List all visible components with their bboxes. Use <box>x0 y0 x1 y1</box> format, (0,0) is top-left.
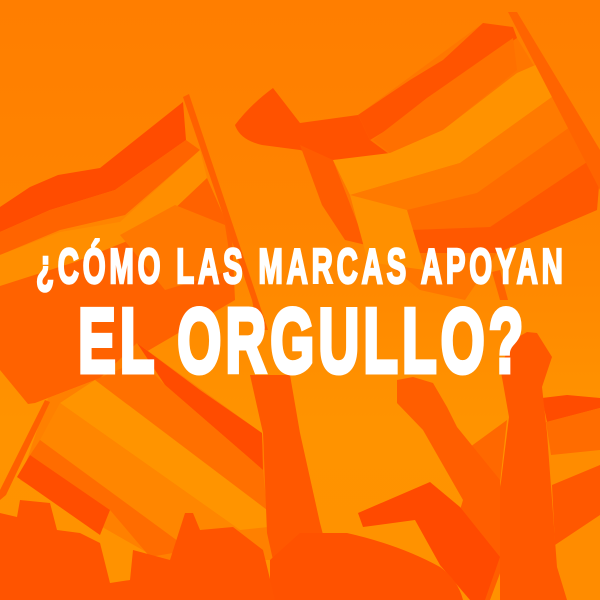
crowd: silhouettes on left <box>0 500 275 600</box>
title line 2: EL ORGULLO? <box>78 290 523 392</box>
flag: upper left <box>0 94 268 404</box>
title <box>36 238 563 392</box>
flag: upper right <box>235 12 600 300</box>
raised arm: fist <box>397 377 505 600</box>
flag: lower left <box>0 343 275 560</box>
crowd: head on right <box>270 533 463 600</box>
flag: lower right <box>440 395 600 600</box>
title line 1: ¿CÓMO LAS MARCAS APOYAN <box>36 238 563 294</box>
raised arm: centre <box>250 375 340 600</box>
raised arm: right <box>500 332 567 600</box>
raised arm: hand in shadow <box>358 482 500 600</box>
